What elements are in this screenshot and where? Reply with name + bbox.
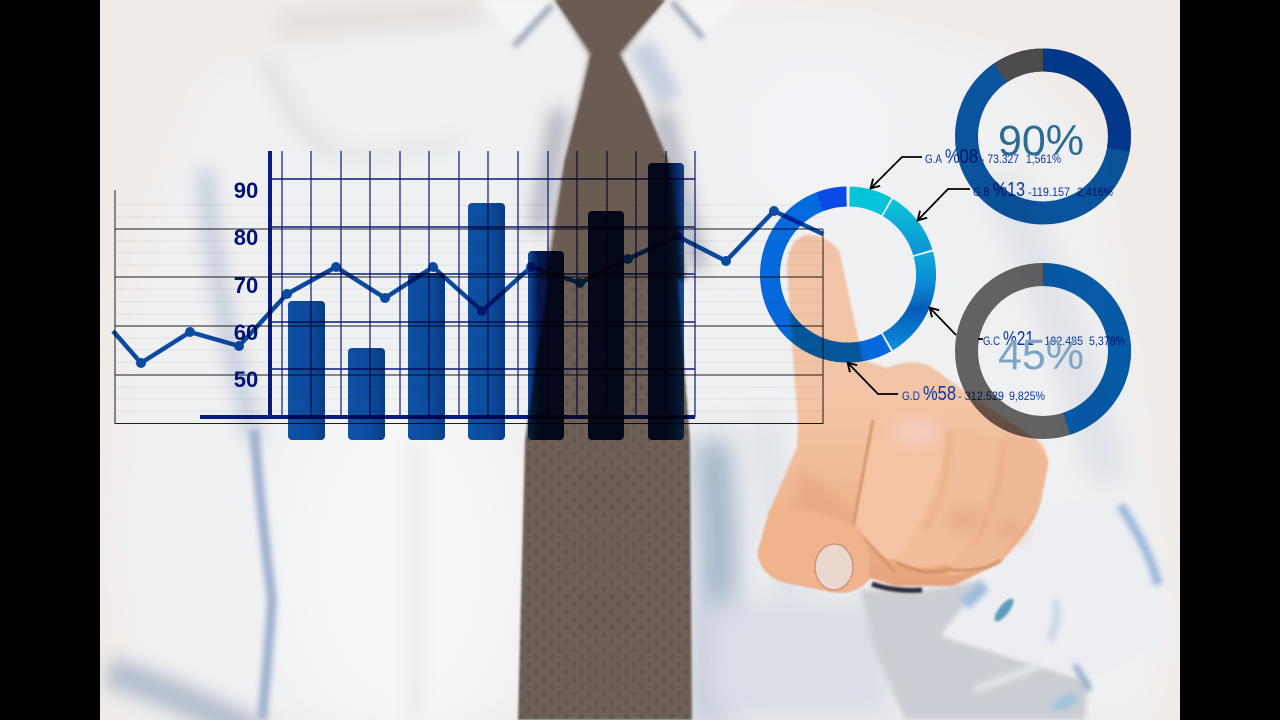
cufflink [993,597,1015,623]
label G.D: %58 [923,383,956,405]
bar 4 [468,203,505,440]
label G.C: 5,378% [1089,334,1125,348]
donut chart 90% [966,60,1120,213]
label G.C: - 192.485 [1038,334,1083,348]
shirt cuff [950,637,1076,678]
bar chart [288,163,684,440]
arm crease [205,170,255,440]
y axis labels: 60 [234,320,258,345]
y axis labels: 50 [234,367,258,392]
label G.B [973,179,1113,201]
center segmented donut [770,196,926,353]
line chart [113,206,823,368]
bar 6 [588,211,624,440]
shirt sleeve opening [872,584,922,590]
bar 7 [648,163,684,440]
label G.C: %21 [1003,328,1034,350]
right torso shading [712,440,718,720]
thumbnail [815,544,853,590]
hand pointing [758,235,1048,592]
value 90%: 90% [998,117,1084,165]
y axis labels: 70 [234,273,258,298]
label G.A [925,146,1061,168]
label G.A: %08 [945,146,978,168]
data labels with callout arrows [902,146,1125,405]
tie [518,0,692,720]
tie shadow [538,110,698,270]
label G.D: - 312.529 [958,389,1004,403]
collar [486,2,542,12]
left black grid [115,190,823,424]
label G.B: G.B [973,185,990,199]
ring and little finger [945,435,1048,576]
blue grid and axes [200,151,695,418]
sleeve under cuff [860,580,1088,720]
palm shadow [790,470,870,565]
label G.A: - 73.327 [981,152,1019,166]
label G.B: -119.157 [1028,185,1070,199]
middle finger [895,428,1003,568]
donut chart 45% [966,274,1120,428]
label G.D [902,383,1045,405]
label G.A: G.A [925,152,942,166]
label G.C: G.C [983,334,1000,348]
callout arrows [848,157,983,394]
label G.A: 1,561% [1026,152,1061,166]
label G.D: 9,825% [1009,389,1045,403]
bar 3 [408,273,445,440]
label G.B: 2,416% [1077,185,1113,199]
bar 2 [348,348,385,440]
y axis labels [234,178,258,392]
label G.D: G.D [902,389,920,403]
value 45%: 45% [998,331,1084,379]
y axis labels: 80 [234,225,258,250]
bar 1 [288,301,325,440]
thumb [758,509,869,592]
label G.C [983,328,1125,350]
label G.B: %13 [993,179,1025,201]
bar 5 [528,251,564,440]
index finger curled [853,408,945,560]
y axis labels: 90 [234,178,258,203]
